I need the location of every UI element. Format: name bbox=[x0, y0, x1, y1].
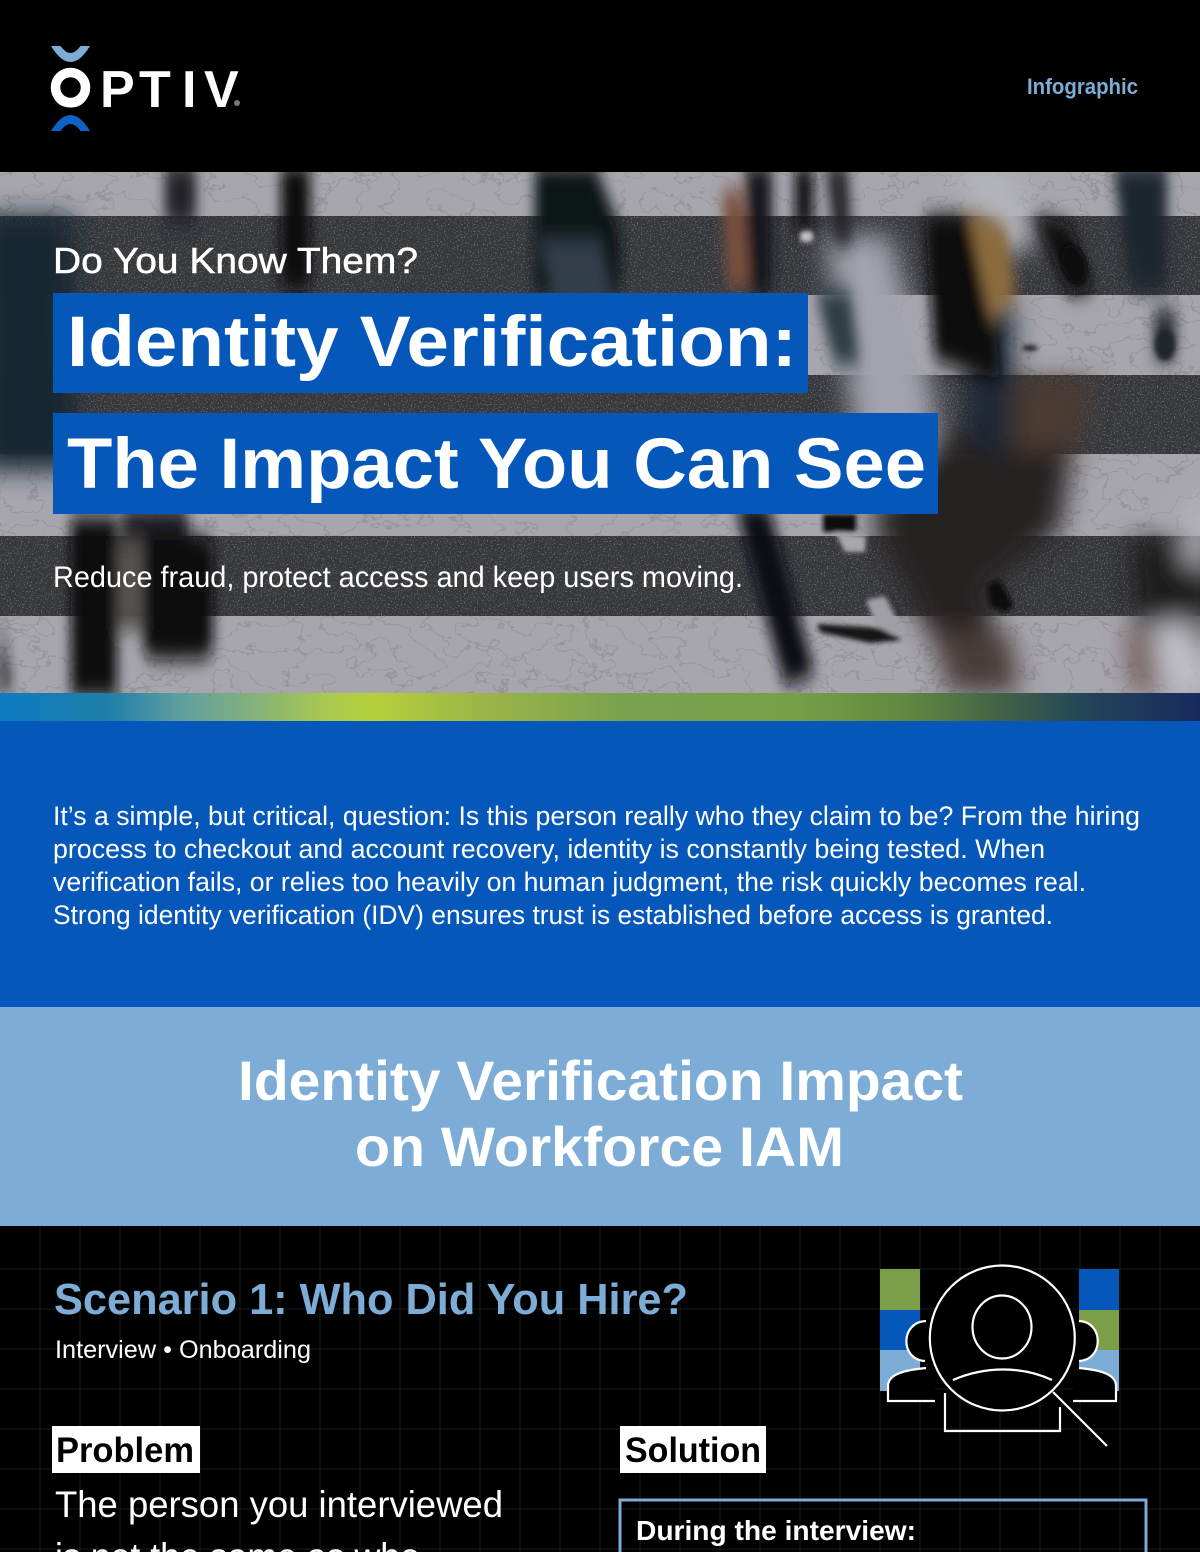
section heading text bbox=[238, 1049, 963, 1178]
header logo: OPTIV: O bbox=[50, 61, 91, 119]
intro paragraph bbox=[53, 801, 1140, 930]
solution label: Solution bbox=[625, 1431, 761, 1470]
problem text: The person you interviewed bbox=[55, 1484, 503, 1525]
section heading text: on Workforce IAM bbox=[355, 1115, 844, 1178]
solution card: During the interview: bbox=[636, 1515, 916, 1546]
panel: section heading bbox=[0, 1007, 1200, 1226]
scenario heading: Scenario 1: Who Did You Hire? bbox=[54, 1275, 688, 1324]
hero subtitle: Reduce fraud, protect access and keep users moving. bbox=[53, 561, 743, 594]
section heading text: Identity Verification Impact bbox=[238, 1049, 963, 1112]
scenario tags: Interview • Onboarding bbox=[55, 1336, 311, 1364]
header logo: OPTIV: PTIV bbox=[100, 61, 239, 119]
hero title: line two: The Impact You Can See bbox=[67, 425, 926, 504]
intro paragraph: Strong identity verification (IDV) ensures trust is established before access is granted. bbox=[53, 900, 1053, 930]
header label: Infographic: Infographic bbox=[1027, 74, 1138, 99]
problem label: Problem bbox=[56, 1431, 194, 1470]
icon: magnifier over people bbox=[880, 1266, 1119, 1446]
intro paragraph: process to checkout and account recovery, identity is constantly being tested. When bbox=[53, 834, 1045, 864]
panel: introduction bbox=[0, 721, 1200, 1007]
hero eyebrow: Do You Know Them? bbox=[53, 240, 418, 281]
solution card bbox=[620, 1500, 1146, 1552]
header logo: OPTIV bbox=[50, 46, 240, 131]
problem text bbox=[55, 1484, 503, 1552]
intro paragraph: verification fails, or relies too heavily on human judgment, the risk quickly becomes real. bbox=[53, 867, 1086, 897]
hero photo: blurred pedestrians on a crosswalk bbox=[0, 165, 1200, 697]
spectrum colour band bbox=[0, 693, 1200, 721]
panel: scenario 1 bbox=[0, 1226, 1200, 1552]
hero title: line one: Identity Verification: bbox=[67, 303, 797, 382]
intro paragraph: It’s a simple, but critical, question: Is this person really who they claim to be? From the hiring bbox=[53, 801, 1140, 831]
